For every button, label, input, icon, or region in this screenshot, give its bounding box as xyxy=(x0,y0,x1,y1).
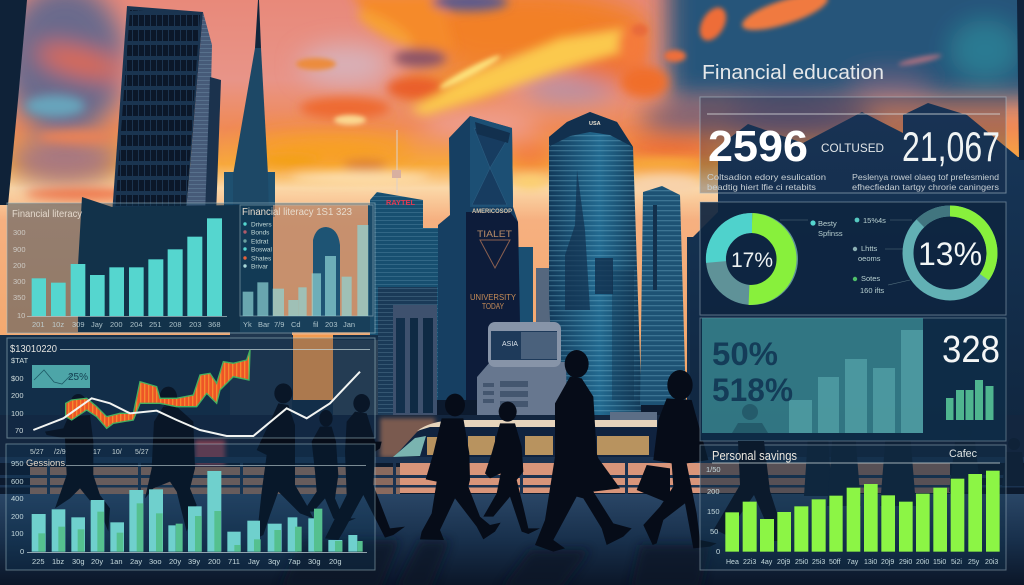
x axis labels: 201 xyxy=(32,320,45,329)
y axis labels xyxy=(13,228,26,320)
x axis labels: 20y xyxy=(91,557,103,566)
y axis labels: 300 xyxy=(13,277,26,286)
x axis labels: 20j9 xyxy=(881,559,894,566)
y axis labels: 100 xyxy=(11,529,24,538)
y axis labels: 50 xyxy=(710,527,718,536)
x axis labels: Jay xyxy=(91,320,103,329)
legend list: Etdrat xyxy=(251,238,269,246)
x axis labels: 30g xyxy=(72,557,85,566)
x axis labels xyxy=(32,557,342,566)
x axis labels: 39y xyxy=(188,557,200,566)
person: large man with briefcase xyxy=(535,350,632,552)
x axis labels: 25y xyxy=(968,559,980,566)
x axis labels: 15i0 xyxy=(933,559,946,566)
pavement xyxy=(0,494,1024,585)
donut legend left: Besty xyxy=(818,219,837,228)
description left: Coltsadion edory esulication xyxy=(707,172,826,182)
x axis labels: 20y xyxy=(169,557,181,566)
person: tall walker xyxy=(325,394,405,540)
y axis labels: 150 xyxy=(707,507,720,516)
person: centre child xyxy=(483,402,540,534)
donut legend right: Lhtts xyxy=(861,244,878,253)
x axis labels: 29i0 xyxy=(899,559,912,566)
panel: financial literacy bar chart xyxy=(7,197,375,333)
person: woman with handbag xyxy=(637,370,717,548)
x axis labels: 225 xyxy=(32,557,45,566)
label: coltused: COLTUSED xyxy=(821,141,884,155)
top axis labels: 10/ xyxy=(112,449,122,456)
commuter silhouettes walking xyxy=(45,350,717,552)
donut: 17% xyxy=(716,223,788,295)
mid-ground city base xyxy=(0,330,1024,466)
x axis labels: Yk xyxy=(243,320,252,329)
teal bars xyxy=(32,218,222,316)
mini bars xyxy=(946,380,994,420)
y axis labels xyxy=(11,356,29,435)
description left: beadtig hiert lfie ci retabits xyxy=(707,182,816,192)
donut legend left xyxy=(780,219,843,238)
chart value heading: $13010220 xyxy=(10,344,57,355)
x axis labels: 200 xyxy=(110,320,123,329)
inset sparkline 25% xyxy=(32,365,90,388)
skyline buildings: USA xyxy=(589,121,601,127)
heading: financial literacy: Financial literacy xyxy=(12,208,83,220)
top axis labels xyxy=(30,449,149,456)
person: centre woman xyxy=(420,394,501,540)
y axis labels: 10 xyxy=(17,311,25,320)
legend list xyxy=(243,222,273,270)
x axis labels: 7ap xyxy=(288,557,301,566)
donut legend right: Sotes xyxy=(861,274,880,283)
translucent bars xyxy=(789,330,923,433)
x axis labels: fil xyxy=(313,320,319,329)
foreground building silhouette on the right xyxy=(690,0,1024,440)
skyline buildings: TODAY xyxy=(482,302,505,311)
x axis labels xyxy=(32,320,355,329)
panel: sessions bar chart xyxy=(6,444,375,570)
x axis labels: 13i0 xyxy=(864,559,877,566)
x axis labels: 309 xyxy=(72,320,85,329)
x axis labels: 7ay xyxy=(847,559,859,566)
person: second left xyxy=(145,387,197,532)
y axis labels: 200 xyxy=(11,391,24,400)
person: suited man left of centre xyxy=(257,383,313,538)
x axis labels: 711 xyxy=(228,557,240,566)
figure: 328: 328 xyxy=(942,329,1000,371)
x axis labels: 7/9 xyxy=(274,320,284,329)
x axis labels: 50ff xyxy=(829,559,841,566)
x axis labels: 251 xyxy=(149,320,162,329)
dark blue upper right sky xyxy=(640,0,1024,136)
panel: percentage figures xyxy=(700,318,1006,441)
figure: 518%: 518% xyxy=(712,372,793,408)
legend list: Brivar xyxy=(251,264,269,270)
x axis labels: 203 xyxy=(189,320,202,329)
person: small walker xyxy=(303,410,356,523)
top axis labels: /2/9 xyxy=(54,449,66,456)
y axis labels: 200 xyxy=(11,512,24,521)
heading: sessions: Gessions xyxy=(26,458,65,469)
legend list: Drivers xyxy=(251,222,272,228)
panel: donut charts xyxy=(700,202,1006,315)
legend list: Boswal xyxy=(251,246,273,254)
x axis labels: 22i3 xyxy=(743,559,756,566)
figure: 50%: 50% xyxy=(712,336,778,372)
x axis labels: 200 xyxy=(208,557,221,566)
x axis labels: 5i2i xyxy=(951,559,962,566)
panel: line chart xyxy=(7,338,375,438)
drum building with logo xyxy=(477,322,567,418)
description right: efhecfiedan tartgy chrorie caningers xyxy=(852,182,999,192)
white trend line xyxy=(33,372,360,436)
y axis labels: 950 xyxy=(11,459,24,468)
x axis labels: 25i3 xyxy=(812,559,825,566)
faint silhouette seen through the panel xyxy=(732,404,768,433)
x axis labels: 20j9 xyxy=(777,559,790,566)
donut legend right: oeoms xyxy=(858,254,881,263)
donut legend right xyxy=(853,216,912,295)
x axis labels: 20i0 xyxy=(916,559,929,566)
figure: 2596: 2596 xyxy=(708,122,808,171)
donut legend right: 160 ifts xyxy=(860,286,884,295)
x axis labels: 3oo xyxy=(149,557,162,566)
description right: Peslenya rowel olaeg tof prefesmiend xyxy=(852,172,999,182)
x axis labels: Jay xyxy=(248,557,260,566)
dark building behind bars xyxy=(78,197,240,332)
x axis labels: 1bz xyxy=(52,557,64,566)
teal bars xyxy=(32,471,357,552)
y axis labels: 600 xyxy=(11,477,24,486)
skyline buildings: UNIVERSITY xyxy=(470,292,516,302)
donut legend right: 15%4s xyxy=(863,216,886,225)
donut legend left: Spfinss xyxy=(818,229,843,238)
donut: 17%: 17% xyxy=(731,249,773,272)
inset sparkline 25%: 25% xyxy=(68,372,88,383)
silhouettes of distant commuters xyxy=(804,415,1024,506)
x axis labels: 368 xyxy=(208,320,221,329)
y axis labels: 350 xyxy=(13,293,26,302)
x axis labels: 20g xyxy=(329,557,342,566)
background walker behind chart xyxy=(714,441,786,541)
y axis labels xyxy=(706,465,721,556)
drum building with logo: ASIA xyxy=(502,341,518,348)
x axis labels: 3qy xyxy=(268,557,280,566)
heading: personal savings: Personal savings xyxy=(712,448,797,463)
green bars xyxy=(725,471,1000,552)
y axis labels xyxy=(11,459,24,556)
legend list: Shates xyxy=(251,256,272,262)
x axis labels xyxy=(726,559,998,566)
x axis labels: 20i3 xyxy=(985,559,998,566)
donut: 13%: 13% xyxy=(918,236,982,272)
y axis labels: 200 xyxy=(13,261,26,270)
y axis labels: $00 xyxy=(11,374,24,383)
sub-panel backdrop xyxy=(240,205,374,332)
x axis labels: 208 xyxy=(169,320,182,329)
x axis labels: 10z xyxy=(52,320,64,329)
x axis labels: Bar xyxy=(258,320,270,329)
heading: financial literacy 2: Financial literacy 1S1 323 xyxy=(242,206,352,218)
y axis labels: 0 xyxy=(716,547,720,556)
x axis labels: 4ay xyxy=(761,559,773,566)
top axis labels: 5/27 xyxy=(135,449,149,456)
y axis labels: 1/50 xyxy=(706,465,721,474)
y axis labels: 300 xyxy=(13,228,26,237)
person: far left xyxy=(45,394,110,532)
x axis labels: 204 xyxy=(130,320,143,329)
skyline buildings: TIALET xyxy=(477,229,513,239)
y axis labels: 100 xyxy=(11,409,24,418)
y axis labels: 0 xyxy=(20,547,24,556)
x axis labels: Hea xyxy=(726,559,739,566)
y axis labels: $TAT xyxy=(11,356,29,365)
top axis labels: 17 xyxy=(93,449,101,456)
x axis labels: Cd xyxy=(291,320,301,329)
y axis labels: 200 xyxy=(707,487,720,496)
translucent bars xyxy=(243,225,368,316)
legend list: Bonds xyxy=(251,230,270,236)
x axis labels: 203 xyxy=(325,320,338,329)
skyline buildings: RAYTEL xyxy=(386,200,416,207)
label: coffee: Cafec xyxy=(949,448,977,460)
skyline buildings: AMERICOSOP xyxy=(472,209,512,215)
heading: financial education: Financial education xyxy=(702,62,884,84)
railing xyxy=(0,457,1024,496)
x axis labels: 25i0 xyxy=(795,559,808,566)
y axis labels: 400 xyxy=(11,494,24,503)
train xyxy=(393,420,657,458)
green bars xyxy=(38,503,363,552)
y axis labels: 900 xyxy=(13,245,26,254)
sunset sky xyxy=(0,0,1024,400)
panel: personal savings bar chart xyxy=(700,441,1006,570)
top axis labels: 5/27 xyxy=(30,449,44,456)
y axis labels: 70 xyxy=(15,426,23,435)
candlestick price band xyxy=(66,350,250,428)
panel: headline figures xyxy=(700,97,1006,193)
x axis labels: 2ay xyxy=(130,557,142,566)
x axis labels: 1an xyxy=(110,557,123,566)
donut: 13% xyxy=(908,211,992,295)
x axis labels: Jan xyxy=(343,320,355,329)
skyline buildings xyxy=(0,0,701,420)
x axis labels: 30g xyxy=(308,557,321,566)
